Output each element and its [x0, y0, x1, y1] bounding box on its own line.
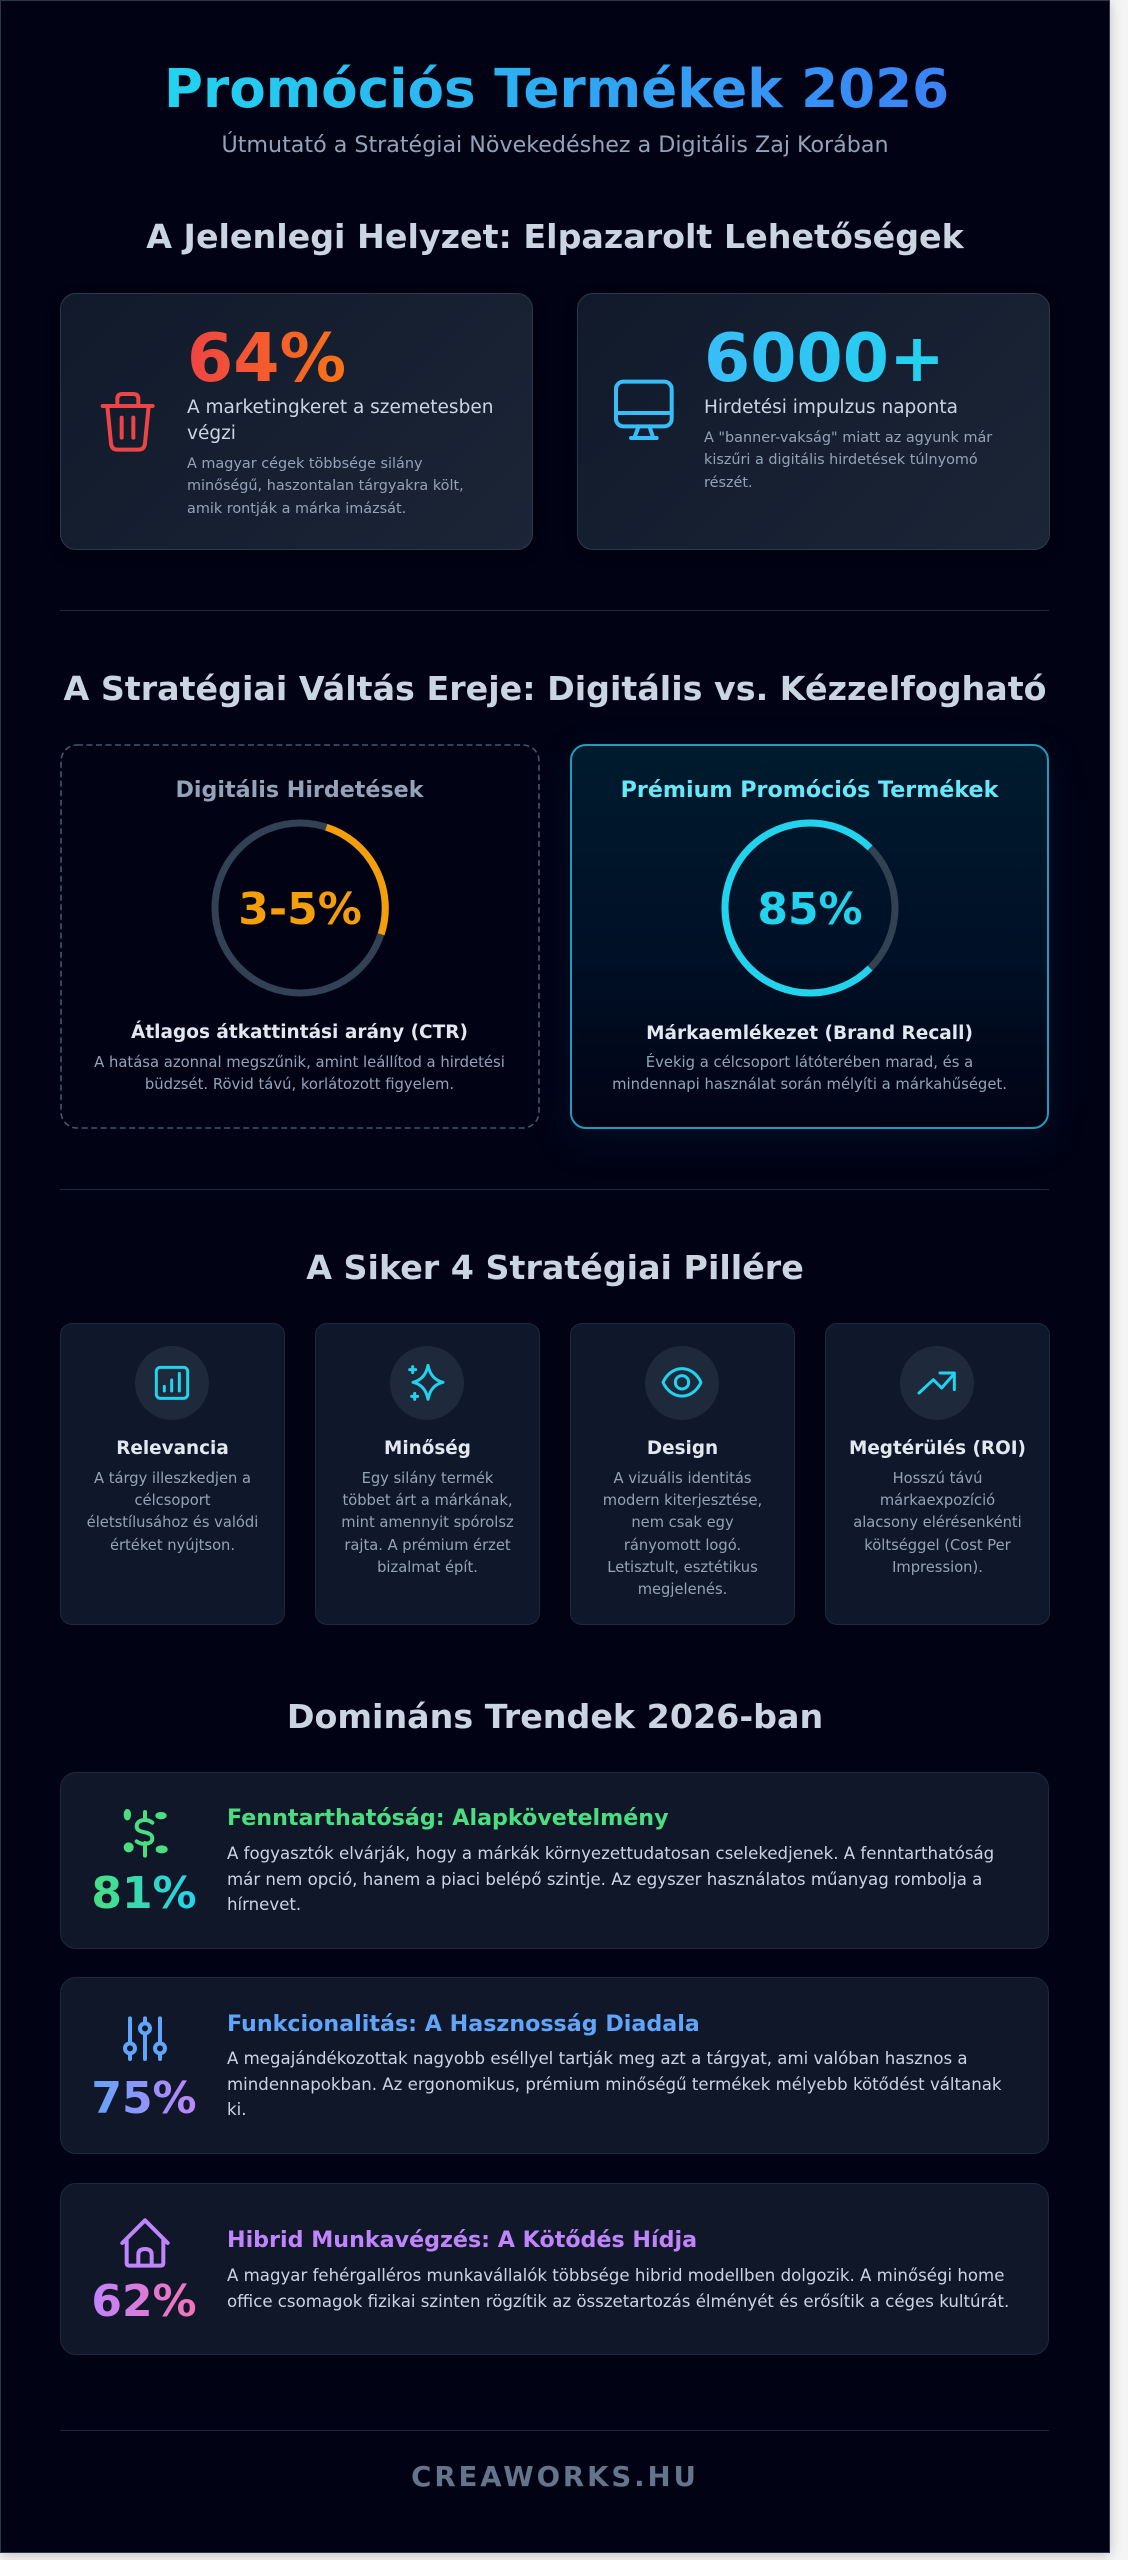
panel: stat 64%	[60, 293, 533, 550]
metric title: Márkaemlékezet (Brand Recall)	[646, 1023, 973, 1044]
icon: trash	[100, 392, 155, 452]
pillar text: Letisztult, esztétikus	[607, 1559, 758, 1576]
trend title: Hibrid Munkavégzés: A Kötődés Hídja	[227, 2227, 697, 2253]
subtitle: Útmutató a Stratégiai Növekedéshez a Digitális Zaj Korában	[221, 132, 889, 158]
icon: sliders	[123, 2016, 167, 2061]
stat label	[187, 397, 493, 444]
pillar text: költséggel (Cost Per	[864, 1537, 1011, 1554]
stat value: 6000+	[704, 319, 945, 397]
icon: eco dollar	[124, 1809, 168, 1858]
heading: strategic shift: A Stratégiai Váltás Ereje: Digitális vs. Kézzelfogható	[63, 669, 1047, 708]
pillar text: nem csak egy	[631, 1514, 734, 1531]
trend text: ki.	[227, 2100, 246, 2119]
stat label: végzi	[187, 423, 236, 444]
trend text	[227, 2049, 1002, 2119]
panel: pillar ROI	[825, 1323, 1050, 1625]
stat description: amik rontják a márka imázsát.	[187, 501, 406, 517]
metric description	[612, 1053, 1007, 1093]
pillar text: rajta. A prémium érzet	[344, 1537, 511, 1554]
pillar text	[87, 1470, 258, 1554]
title: Promóciós Termékek 2026	[164, 58, 949, 120]
pillar text: A tárgy illeszkedjen a	[94, 1470, 251, 1487]
pillar text	[341, 1470, 514, 1576]
stat description: részét.	[704, 475, 753, 491]
pillar title: Relevancia	[116, 1438, 229, 1459]
trend text	[227, 1844, 994, 1914]
panel: stat 6000+	[577, 293, 1050, 550]
pillar text: márkaexpozíció	[880, 1492, 995, 1509]
pillar text: Impression).	[892, 1559, 983, 1576]
pillar text: modern kiterjesztése,	[603, 1492, 762, 1509]
pillar text	[853, 1470, 1022, 1576]
metric description: büdzsét. Rövid távú, korlátozott figyelem.	[145, 1076, 454, 1093]
metric description	[94, 1054, 505, 1093]
stat label: Hirdetési impulzus naponta	[704, 397, 958, 418]
trend text: A megajándékozottak nagyobb eséllyel tartják meg azt a tárgyat, ami valóban hasznos a	[227, 2049, 968, 2068]
pillar text: Hosszú távú	[893, 1470, 982, 1487]
heading: current situation: A Jelenlegi Helyzet: Elpazarolt Lehetőségek	[146, 217, 964, 256]
pillar title: Minőség	[384, 1438, 471, 1459]
pillar text: megjelenés.	[638, 1581, 727, 1598]
metric description: A hatása azonnal megszűnik, amint leállítod a hirdetési	[94, 1054, 505, 1071]
trend value: 75%	[91, 2073, 197, 2124]
pillar text: életstílusához és valódi	[87, 1514, 258, 1531]
trend text: office csomagok fizikai szinten rögzítik az összetartozás élményét és erősítik a céges kultúrát.	[227, 2292, 1009, 2311]
trend text: mindennapokban. Az ergonomikus, prémium minőségű termékek mélyebb kötődést váltanak	[227, 2075, 1002, 2094]
panel: trend functionality	[60, 1977, 1049, 2154]
stat description: A magyar cégek többsége silány	[187, 456, 422, 472]
pillar text: célcsoport	[134, 1492, 210, 1509]
pillar title: Design	[647, 1438, 718, 1459]
panel: pillar design	[570, 1323, 795, 1625]
stat description: minőségű, haszontalan tárgyakra költ,	[187, 478, 464, 494]
icon: sparkles	[390, 1346, 464, 1420]
icon: chart	[135, 1346, 209, 1420]
trend text	[227, 2266, 1009, 2311]
panel: digital ads	[60, 744, 540, 1129]
pillar text: A vizuális identitás	[614, 1470, 752, 1487]
stat description: kiszűri a digitális hirdetések túlnyomó	[704, 452, 978, 468]
stat description	[704, 430, 992, 491]
metric title: Átlagos átkattintási arány (CTR)	[131, 1022, 468, 1043]
ring value: 3-5%	[238, 884, 362, 935]
panel: pillar relevance	[60, 1323, 285, 1625]
pillar text	[603, 1470, 762, 1598]
stat description: A "banner-vakság" miatt az agyunk már	[704, 430, 992, 446]
trend value: 62%	[91, 2276, 197, 2327]
trend text: A fogyasztók elvárják, hogy a márkák környezettudatosan cselekedjenek. A fenntarthatóság	[227, 1844, 994, 1863]
heading: pillars: A Siker 4 Stratégiai Pillére	[306, 1248, 804, 1287]
pillar title: Megtérülés (ROI)	[849, 1438, 1026, 1459]
icon: trending up	[900, 1346, 974, 1420]
trend text: hírnevet.	[227, 1895, 301, 1914]
stat label: A marketingkeret a szemetesben	[187, 397, 493, 418]
panel: trend sustainability	[60, 1772, 1049, 1949]
pillar text: mint amennyit spórolsz	[341, 1514, 514, 1531]
panel: premium promotional products	[570, 744, 1049, 1129]
panel: pillar quality	[315, 1323, 540, 1625]
metric description: Évekig a célcsoport látóterében marad, és a	[646, 1054, 973, 1071]
pillar text: rányomott logó.	[624, 1537, 741, 1554]
pillar text: többet árt a márkának,	[342, 1492, 513, 1509]
panel: trend hybrid work	[60, 2183, 1049, 2355]
pillar text: Egy silány termék	[362, 1470, 493, 1487]
ring chart: 85%	[722, 820, 898, 996]
panel heading: Prémium Promóciós Termékek	[621, 777, 998, 803]
trend title: Funkcionalitás: A Hasznosság Diadala	[227, 2011, 700, 2037]
heading: trends: Domináns Trendek 2026-ban	[287, 1697, 823, 1736]
metric description: mindennapi használat során mélyíti a márkahűséget.	[612, 1076, 1007, 1093]
pillar text: bizalmat épít.	[377, 1559, 478, 1576]
ring value: 85%	[757, 884, 863, 935]
stat value: 64%	[187, 319, 346, 397]
trend text: A magyar fehérgalléros munkavállalók többsége hibrid modellben dolgozik. A minőségi home	[227, 2266, 1004, 2285]
footer brand: CREAWORKS.HU	[411, 2460, 699, 2493]
icon: eye	[645, 1346, 719, 1420]
icon: house	[120, 2218, 170, 2268]
trend title: Fenntarthatóság: Alapkövetelmény	[227, 1805, 669, 1831]
panel heading: Digitális Hirdetések	[176, 777, 423, 803]
stat description	[187, 456, 464, 517]
ring chart: 3-5%	[212, 820, 389, 996]
trend value: 81%	[91, 1868, 197, 1919]
pillar text: értéket nyújtson.	[110, 1537, 235, 1554]
trend text: már nem opció, hanem a piaci belépő szintje. Az egyszer használatos műanyag rombolja a	[227, 1870, 982, 1889]
icon: monitor	[614, 380, 674, 440]
pillar text: alacsony elérésenkénti	[853, 1514, 1022, 1531]
